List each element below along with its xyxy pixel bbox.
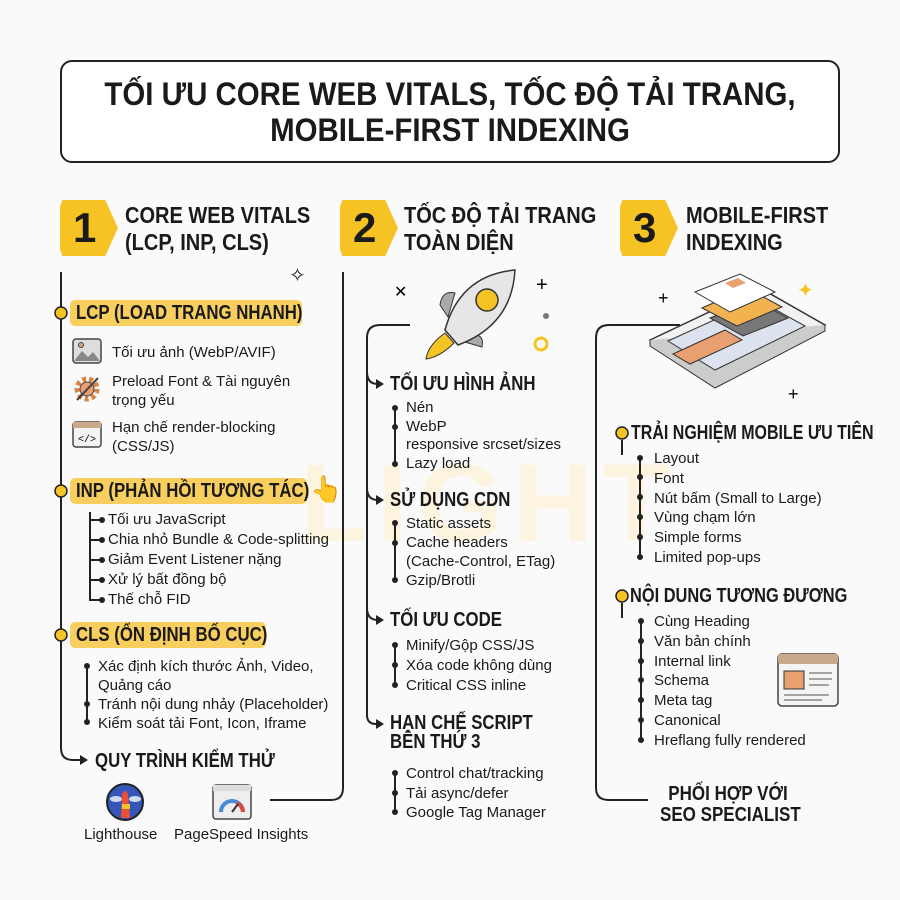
column 1 header: 1	[73, 204, 96, 251]
icon: pagespeed	[212, 784, 252, 820]
pill: LCP: LCP (LOAD TRANG NHANH)	[76, 302, 302, 324]
CLS items: Kiểm soát tải Font, Icon, Iframe	[98, 715, 306, 732]
text: Hreflang fully rendered	[654, 732, 806, 749]
INP items: Xử lý bất đồng bộ	[108, 571, 226, 588]
text: Internal link	[654, 653, 731, 670]
INP items: Tối ưu JavaScript	[108, 511, 226, 528]
icon: code window	[72, 421, 102, 448]
section: code: TỐI ƯU CODE	[390, 609, 502, 631]
text: (Cache-Control, ETag)	[406, 553, 555, 570]
text: Static assets	[406, 515, 491, 532]
illustration: phone with layers: ✦	[797, 280, 814, 302]
section: images: TỐI ƯU HÌNH ẢNH	[390, 373, 536, 395]
text: Vùng chạm lớn	[654, 509, 756, 526]
text: Gzip/Brotli	[406, 572, 475, 589]
text: Tải async/defer	[406, 784, 509, 802]
column 3 header: INDEXING	[686, 229, 783, 255]
icon: image	[72, 338, 102, 364]
text: PageSpeed Insights	[174, 826, 308, 843]
text: Văn bản chính	[654, 633, 751, 650]
column 1 header: CORE WEB VITALS	[125, 202, 310, 228]
section: 3rd party scripts	[390, 711, 533, 753]
column 3 header	[620, 200, 828, 256]
CLS items: Xác định kích thước Ảnh, Video,	[98, 658, 314, 675]
section: equivalent content: NỘI DUNG TƯƠNG ĐƯƠNG	[630, 585, 847, 607]
pill: CLS: CLS (ỔN ĐỊNH BỐ CỤC)	[76, 624, 267, 646]
illustration: rocket: +	[536, 274, 548, 296]
icon: hand click: 👆	[310, 474, 342, 504]
column 3 header: 3	[633, 204, 656, 251]
section: CDN: SỬ DỤNG CDN	[390, 489, 510, 511]
column 2 header: TỐC ĐỘ TẢI TRANG	[404, 202, 596, 228]
text: Meta tag	[654, 692, 712, 709]
CLS items: Quảng cáo	[98, 677, 171, 694]
text: Nén	[406, 399, 434, 416]
LCP items: (CSS/JS)	[112, 438, 175, 455]
column 2 header	[340, 200, 596, 256]
icon: sparkle: ✧	[289, 265, 306, 287]
LCP items: trọng yếu	[112, 392, 175, 409]
text: Control chat/tracking	[406, 765, 544, 782]
section: mobile UX: TRẢI NGHIỆM MOBILE ƯU TIÊN	[631, 422, 874, 444]
INP items: Thế chỗ FID	[108, 591, 191, 608]
text: Nút bấm (Small to Large)	[654, 490, 822, 507]
text: Google Tag Manager	[406, 804, 546, 821]
icon: gear	[74, 376, 100, 402]
icon: lighthouse	[106, 783, 144, 821]
CLS items: Tránh nội dung nhảy (Placeholder)	[98, 696, 328, 713]
labels: tools: Lighthouse	[84, 826, 157, 843]
icon: browser window	[777, 653, 839, 707]
watermark: LIGHT	[300, 442, 680, 565]
illustration: rocket: ✕	[394, 284, 407, 301]
INP items	[108, 511, 329, 608]
text: Cache headers	[406, 534, 508, 551]
text: Xóa code không dùng	[406, 657, 552, 674]
text: Lazy load	[406, 455, 470, 472]
LCP items	[72, 338, 290, 455]
text: Critical CSS inline	[406, 677, 526, 694]
column 2 header: TOÀN DIỆN	[404, 229, 514, 255]
icon: code window: </>	[78, 434, 96, 446]
illustration: phone with layers	[648, 274, 826, 404]
text: Limited pop-ups	[654, 549, 761, 566]
INP items: Chia nhỏ Bundle & Code-splitting	[108, 531, 329, 548]
footer: SEO specialist: SEO SPECIALIST	[660, 804, 801, 826]
LCP items: Hạn chế render-blocking	[112, 419, 275, 436]
title box	[60, 60, 840, 163]
text: Schema	[654, 672, 709, 689]
text: Simple forms	[654, 529, 742, 546]
title box: TỐI ƯU CORE WEB VITALS, TỐC ĐỘ TẢI TRANG,	[104, 76, 796, 112]
text: Canonical	[654, 712, 721, 729]
column 1 header: (LCP, INP, CLS)	[125, 229, 269, 255]
text: Minify/Gộp CSS/JS	[406, 637, 534, 654]
footer: SEO specialist: PHỐI HỢP VỚI	[668, 783, 788, 805]
illustration: phone with layers: +	[658, 288, 669, 308]
section: 3rd party scripts: BÊN THỨ 3	[390, 731, 480, 753]
text: Font	[654, 470, 684, 487]
heading: testing: QUY TRÌNH KIỂM THỬ	[95, 750, 275, 772]
title box: MOBILE-FIRST INDEXING	[270, 112, 630, 148]
text: Layout	[654, 450, 699, 467]
illustration: phone with layers: +	[788, 384, 799, 404]
LCP items: Preload Font & Tài nguyên	[112, 373, 290, 390]
text: WebP	[406, 418, 447, 435]
text: responsive srcset/sizes	[406, 436, 561, 453]
pill: INP: INP (PHẢN HỒI TƯƠNG TÁC)	[76, 480, 309, 502]
column 1 header	[60, 200, 310, 256]
column 2 header: 2	[353, 204, 376, 251]
footer: SEO specialist	[660, 782, 801, 826]
CLS items	[98, 658, 328, 732]
section: 3rd party scripts: HẠN CHẾ SCRIPT	[390, 712, 533, 734]
INP items: Giảm Event Listener nặng	[108, 551, 281, 568]
text: Cùng Heading	[654, 613, 750, 630]
illustration: rocket	[394, 269, 549, 360]
column 3 header: MOBILE-FIRST	[686, 202, 828, 228]
LCP items: Tối ưu ảnh (WebP/AVIF)	[112, 344, 276, 361]
